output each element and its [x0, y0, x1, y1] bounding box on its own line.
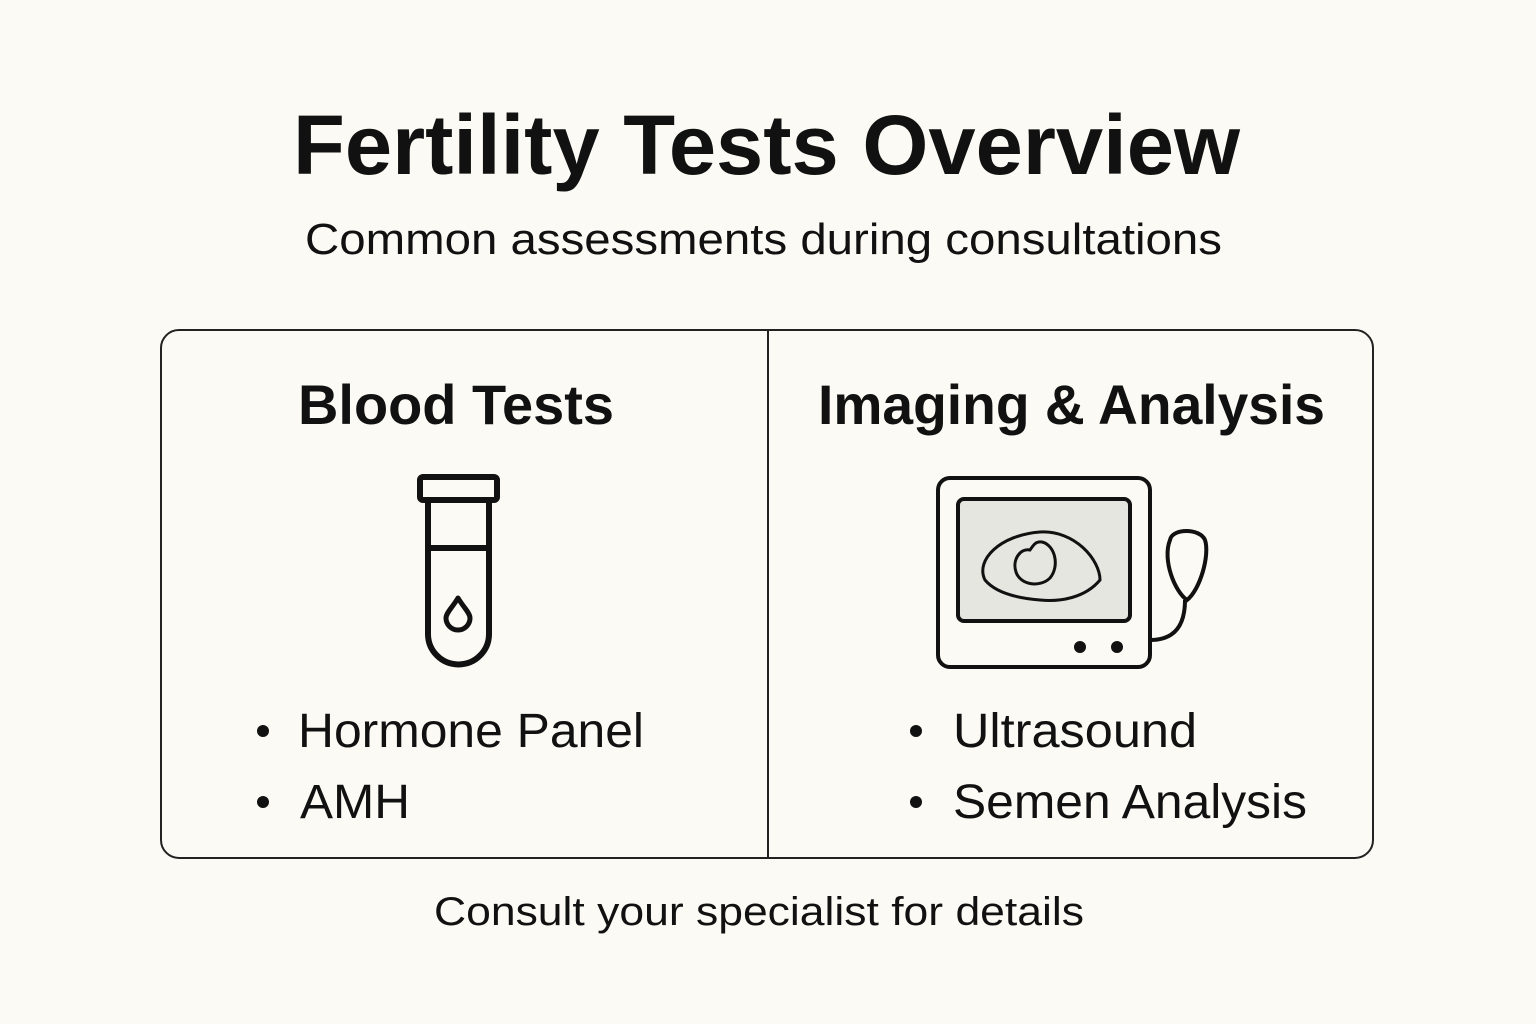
panel: imaging & analysis	[818, 373, 1325, 829]
bullet list: imaging	[910, 705, 1307, 829]
icon: ultrasound machine	[938, 478, 1206, 667]
panel container	[161, 330, 1373, 858]
heading: blood tests: Blood Tests	[298, 373, 614, 436]
footer note: Consult your specialist for details	[434, 890, 1084, 934]
panel: blood tests	[257, 373, 644, 829]
bullet list: blood tests: Hormone Panel	[298, 705, 644, 758]
subtitle: Common assessments during consultations	[305, 215, 1222, 264]
icon: test tube	[420, 477, 497, 664]
bullet list: imaging: Semen Analysis	[953, 776, 1307, 829]
bullet list: blood tests	[257, 705, 644, 829]
bullet list: imaging: Ultrasound	[953, 705, 1197, 758]
bullet list: blood tests: AMH	[300, 776, 410, 829]
title: Fertility Tests Overview	[293, 98, 1241, 192]
heading: imaging: Imaging & Analysis	[818, 373, 1325, 436]
